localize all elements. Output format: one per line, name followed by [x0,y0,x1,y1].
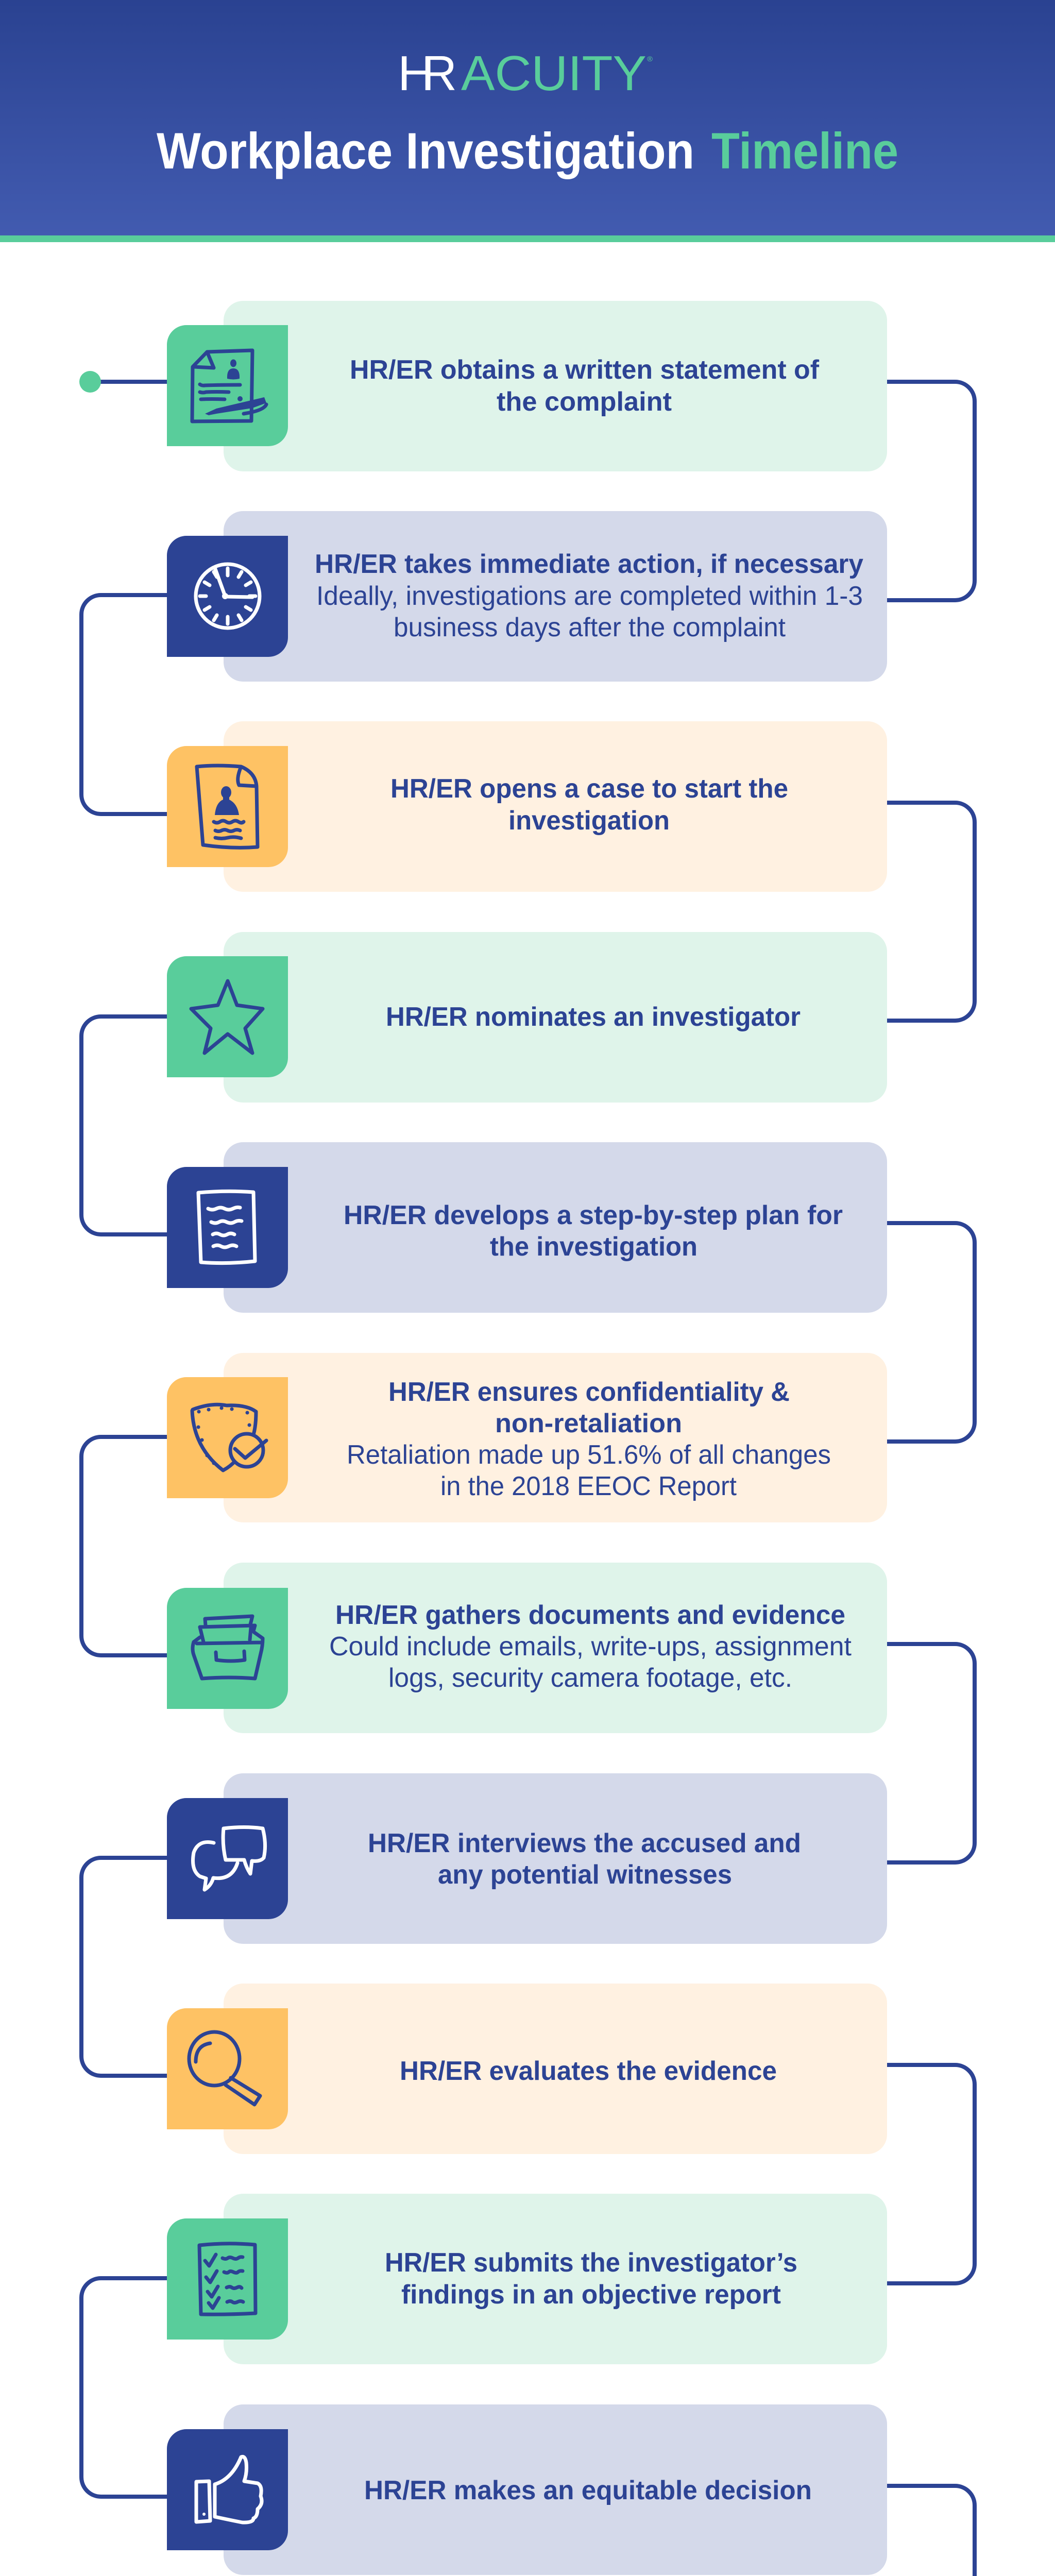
start dot [79,371,167,393]
step text: HR/ER makes an equitable decision [364,2476,812,2505]
step text: HR/ER evaluates the evidence [400,2056,777,2086]
step 2 panel [167,511,887,682]
icon tile [167,1377,288,1498]
step 1 panel [167,301,887,471]
icon tile [167,1167,288,1288]
step text: Ideally, investigations are completed within 1-3 [316,581,863,611]
step text [344,1200,843,1262]
step 5 panel [167,1142,887,1313]
connector: step 1 to 2 [887,382,975,600]
step text: business days after the complaint [394,613,786,642]
step 10 panel [167,2194,887,2364]
connector: step 7 to 8 [887,1644,975,1862]
title: Timeline [711,122,898,179]
step text: the complaint [497,387,672,417]
icon: document plan [198,1191,255,1263]
icon tile [167,325,288,446]
step text: Could include emails, write-ups, assignment [329,1632,852,1662]
icon: magnifying glass [189,2032,260,2105]
step text: HR/ER interviews the accused and [368,1828,801,1858]
header banner [0,0,1055,242]
step text: HR/ER submits the investigator’s [385,2248,797,2278]
card background [224,932,887,1103]
card background [224,2404,887,2575]
card background [224,2194,887,2364]
step text: in the 2018 EEOC Report [440,1471,737,1501]
icon tile [167,536,288,657]
step 3 panel [167,721,887,892]
icon tile [167,1798,288,1919]
connector: step 5 to 6 [887,1223,975,1442]
step text: HR/ER opens a case to start the [390,774,788,804]
step text: HR/ER nominates an investigator [386,1002,801,1032]
connector lines between steps [79,371,975,2576]
step text [315,549,863,642]
icon tile [167,2429,288,2550]
step text [329,1600,852,1693]
card background [224,1984,887,2154]
icon: speech bubbles [193,1827,265,1890]
step 6 panel [167,1353,887,1522]
icon: thumbs up [196,2456,262,2522]
icon tile [167,2008,288,2129]
step text: investigation [508,806,670,836]
logo: R [422,46,457,101]
step text [368,1828,801,1890]
card background [224,1142,887,1313]
icon tile [167,956,288,1077]
step text [385,2248,797,2310]
step text [390,774,788,836]
card background [224,1563,887,1733]
logo: ® [647,55,653,63]
icon tile [167,2218,288,2340]
step text: Retaliation made up 51.6% of all changes [347,1440,831,1470]
step text: HR/ER develops a step-by-step plan for [344,1200,843,1230]
step text [350,355,820,417]
connector: step 8 to 9 [81,1858,167,2076]
card background [224,1773,887,1944]
step text: logs, security camera footage, etc. [388,1663,792,1693]
card background [224,1353,887,1522]
step text: the investigation [490,1232,697,1262]
connector: step 6 to 7 [81,1437,167,1655]
step text: HR/ER gathers documents and evidence [335,1600,845,1630]
logo: H [398,46,434,101]
step text [347,1377,831,1501]
step text: any potential witnesses [438,1860,732,1890]
icon: file drawer [193,1616,263,1679]
step 7 panel [167,1563,887,1733]
card background [224,301,887,471]
step text: HR/ER takes immediate action, if necessary [315,549,863,579]
step 9 panel [167,1984,887,2154]
connector: step 3 to 4 [887,803,975,1021]
step 11 panel [167,2404,887,2575]
icon: signed document [192,350,266,421]
card background [224,511,887,682]
step text: HR/ER ensures confidentiality & [388,1377,790,1407]
icon: checklist [199,2244,256,2314]
connector: step 9 to 10 [887,2065,975,2283]
icon: clock [196,564,260,628]
connector: step 4 to 5 [81,1016,167,1234]
connector: step 2 to 3 [81,595,167,814]
icon tile [167,746,288,867]
step text: findings in an objective report [401,2280,781,2310]
title: Workplace Investigation [157,122,694,179]
connector: step 10 to 11 [81,2278,167,2497]
logo: ACUITY [461,46,646,101]
step text: HR/ER obtains a written statement of [350,355,820,385]
card background [224,721,887,892]
step 8 panel [167,1773,887,1944]
connector: step 11 to 12 [887,2486,975,2576]
step text: non-retaliation [495,1409,682,1438]
icon: star [191,981,263,1053]
icon: case file [197,766,258,848]
step 4 panel [167,932,887,1103]
icon: shield with check [192,1404,266,1470]
icon tile [167,1588,288,1709]
